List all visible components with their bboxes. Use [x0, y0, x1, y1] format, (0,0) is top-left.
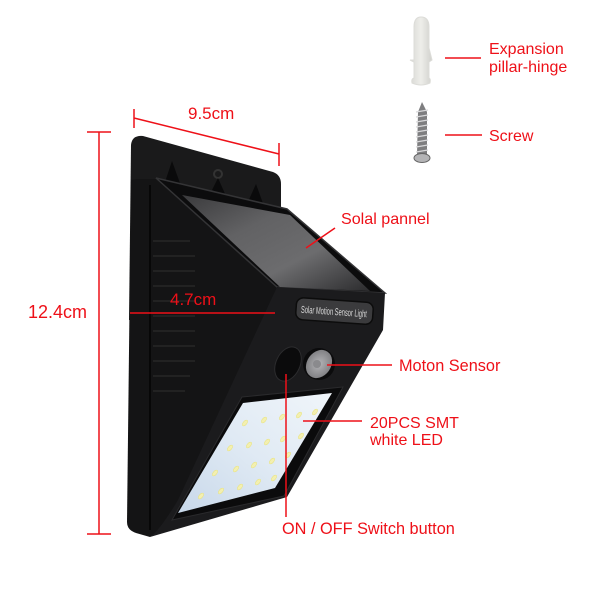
- label: LED second line: white LED: [369, 432, 443, 449]
- label plate: [295, 297, 374, 325]
- red annotation lines: [87, 58, 482, 534]
- motion sensor leader: [327, 364, 392, 366]
- LED frame: [172, 387, 343, 520]
- label: expansion second line: pillar-hinge: [489, 59, 567, 76]
- solar panel leader: [306, 228, 335, 248]
- label: expansion: Expansion: [489, 41, 564, 58]
- label: LED: 20PCS SMT: [370, 415, 459, 432]
- LED leader: [303, 420, 362, 422]
- label: height: 12.4cm: [28, 302, 87, 322]
- expansion leader: [445, 57, 481, 59]
- front face: [150, 287, 385, 537]
- back plate: [129, 136, 281, 320]
- label: width: 9.5cm: [188, 104, 234, 123]
- solar panel frame: [156, 178, 385, 293]
- switch leader: [285, 374, 287, 517]
- motion sensor: [301, 345, 337, 383]
- label: solar panel: Solal pannel: [341, 210, 430, 228]
- accessory: expansion plug: [410, 17, 432, 85]
- screw leader: [445, 134, 482, 136]
- solar panel: [182, 195, 370, 291]
- label plate: Solar Motion Sensor Light: [301, 305, 367, 320]
- width dimension line: [134, 109, 279, 166]
- label: screw: Screw: [489, 128, 534, 145]
- SMT LED chips: [197, 408, 319, 500]
- mounting notches: [165, 161, 265, 209]
- label: motion sensor: Moton Sensor: [399, 357, 501, 375]
- side housing: [127, 179, 277, 537]
- height dimension line: [87, 132, 111, 534]
- side vent ribs: [153, 241, 195, 391]
- label: depth: 4.7cm: [170, 290, 216, 309]
- label: switch: ON / OFF Switch button: [282, 520, 455, 538]
- accessory: screw: [414, 102, 430, 162]
- depth dimension line: [130, 312, 275, 314]
- product: solar light: [127, 136, 385, 537]
- LED panel: [178, 393, 332, 513]
- switch button: [270, 343, 306, 385]
